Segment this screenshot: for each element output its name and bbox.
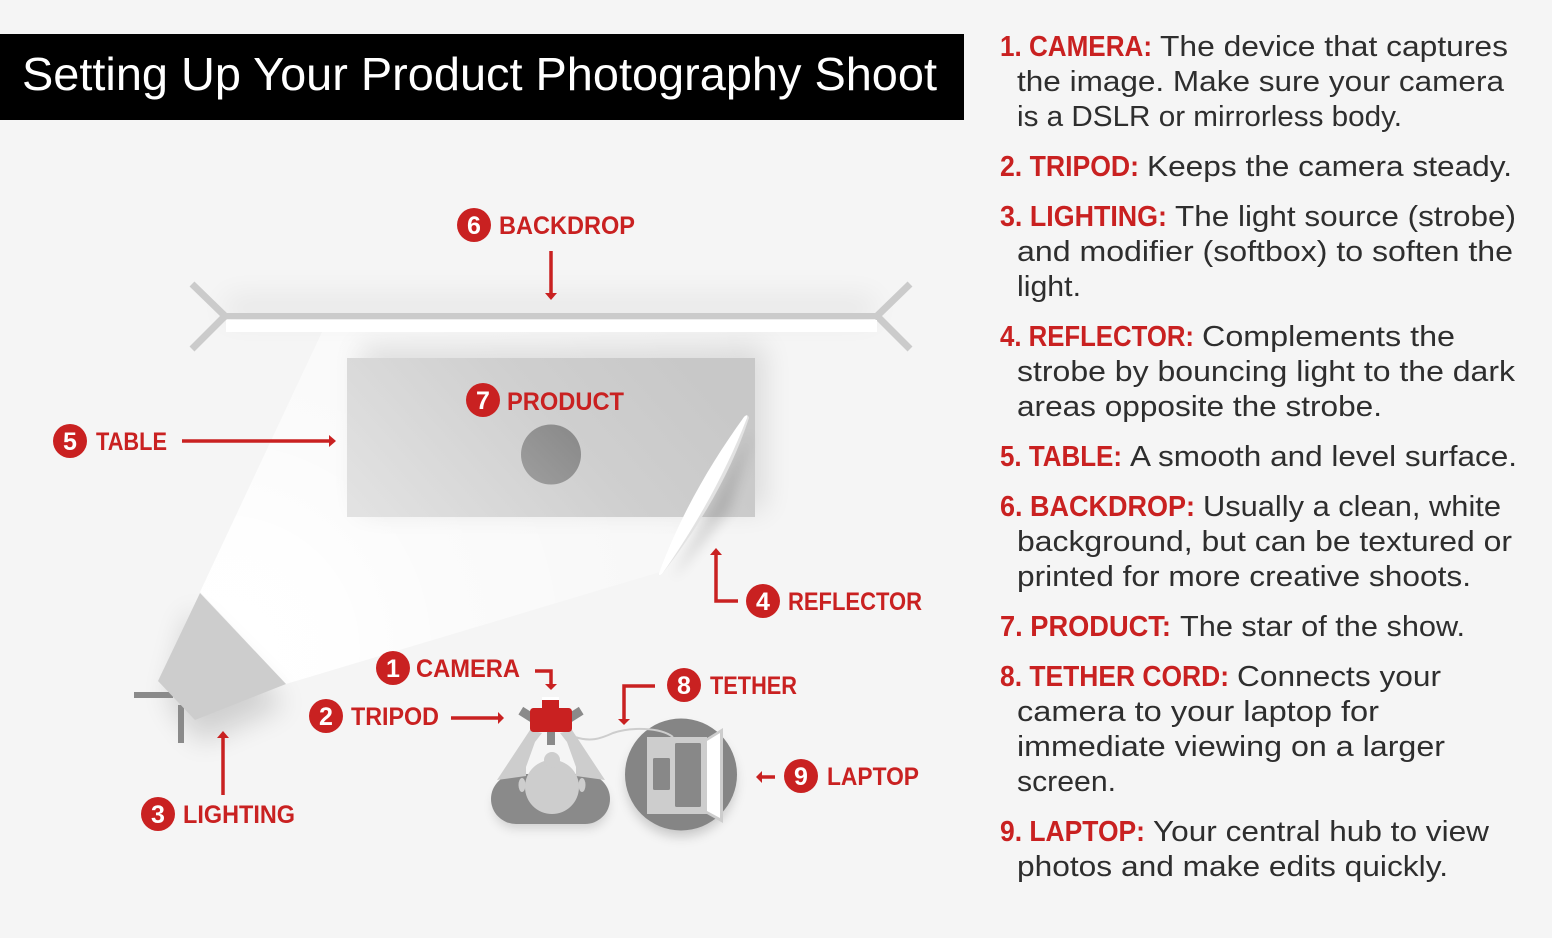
label: camera: CAMERA [416, 655, 520, 683]
item 1 camera: 1. CAMERA: [1000, 31, 1152, 63]
item 6 backdrop: 6. BACKDROP: [1000, 491, 1195, 523]
label: camera: 1 [386, 655, 400, 683]
label: backdrop [457, 208, 635, 300]
item 8 tether cord: 8. TETHER CORD: [1000, 661, 1229, 693]
item 6 backdrop: Usually a clean, white [1203, 491, 1501, 523]
laptop [625, 718, 737, 836]
label: tripod: TRIPOD [351, 703, 439, 731]
label: reflector [710, 548, 922, 618]
photographer with camera and tripod [491, 697, 610, 827]
item 7 product: 7. PRODUCT: [1000, 611, 1171, 643]
label: product: PRODUCT [507, 388, 624, 416]
table [347, 358, 755, 517]
item 3 lighting [1000, 201, 1516, 303]
label: table: TABLE [96, 428, 167, 456]
label: tripod [309, 699, 504, 733]
backdrop shadow [225, 296, 875, 320]
item 2 tripod [1000, 151, 1512, 183]
item 7 product: The star of the show. [1180, 611, 1465, 643]
label: tether: 8 [677, 672, 691, 700]
diagram: studio set-up [134, 284, 910, 836]
item 7 product [1000, 611, 1465, 643]
item 9 laptop: 9. LAPTOP: [1000, 816, 1145, 848]
label: backdrop: 6 [467, 212, 481, 240]
item 1 camera [1000, 31, 1508, 133]
label: product [466, 383, 624, 417]
body [491, 774, 610, 824]
label: lighting: 3 [151, 801, 165, 829]
label: reflector: 4 [756, 588, 770, 616]
label: laptop: LAPTOP [827, 763, 919, 791]
label: product: 7 [476, 387, 490, 415]
softbox light [134, 593, 286, 743]
label: table: 5 [63, 428, 77, 456]
item 5 table [1000, 441, 1517, 473]
item 3 lighting: 3. LIGHTING: [1000, 201, 1167, 233]
label: reflector: REFLECTOR [788, 588, 922, 616]
item 9 laptop [1000, 816, 1490, 883]
arms [497, 730, 542, 780]
item 3 lighting: The light source (strobe) [1175, 201, 1516, 233]
item 4 reflector: areas opposite the strobe. [1017, 391, 1382, 423]
item 1 camera: The device that captures [1160, 31, 1508, 63]
item 5 table: 5. TABLE: [1000, 441, 1122, 473]
item 9 laptop: photos and make edits quickly. [1017, 851, 1448, 883]
item 6 backdrop [1000, 491, 1512, 593]
camera [530, 697, 572, 732]
label: tether [618, 668, 797, 725]
item 8 tether cord: Connects your [1237, 661, 1441, 693]
product [521, 424, 581, 484]
tether cord [575, 729, 673, 740]
label: camera [376, 651, 557, 690]
item 5 table: A smooth and level surface. [1130, 441, 1517, 473]
item 4 reflector: Complements the [1202, 321, 1455, 353]
label: tripod: 2 [319, 703, 333, 731]
item 8 tether cord [1000, 661, 1445, 798]
item 4 reflector: 4. REFLECTOR: [1000, 321, 1194, 353]
item 6 backdrop: printed for more creative shoots. [1017, 561, 1471, 593]
backdrop [192, 284, 910, 349]
item 8 tether cord: camera to your laptop for [1017, 696, 1379, 728]
item 9 laptop: Your central hub to view [1153, 816, 1490, 848]
item 4 reflector [1000, 321, 1516, 423]
tripod [518, 707, 584, 745]
label: table [53, 424, 336, 458]
light beam [200, 332, 790, 684]
title: Setting Up Your Product Photography Shoot [22, 48, 937, 100]
label: laptop [756, 759, 919, 793]
item 6 backdrop: background, but can be textured or [1017, 526, 1512, 558]
table shadow [360, 345, 765, 510]
item 3 lighting: light. [1017, 271, 1081, 303]
legend list [1000, 31, 1517, 883]
item 8 tether cord: immediate viewing on a larger [1017, 731, 1445, 763]
item 8 tether cord: screen. [1017, 766, 1116, 798]
item 4 reflector: strobe by bouncing light to the dark [1017, 356, 1516, 388]
title [0, 34, 964, 120]
item 2 tripod: Keeps the camera steady. [1147, 151, 1512, 183]
item 3 lighting: and modifier (softbox) to soften the [1017, 236, 1513, 268]
label: laptop: 9 [794, 763, 808, 791]
item 1 camera: is a DSLR or mirrorless body. [1017, 101, 1402, 133]
label: lighting [141, 731, 295, 831]
label: lighting: LIGHTING [183, 801, 295, 829]
label: tether: TETHER [710, 672, 797, 700]
reflector [659, 415, 752, 580]
head [518, 752, 586, 814]
label: backdrop: BACKDROP [499, 212, 635, 240]
item 2 tripod: 2. TRIPOD: [1000, 151, 1139, 183]
item 1 camera: the image. Make sure your camera [1017, 66, 1505, 98]
